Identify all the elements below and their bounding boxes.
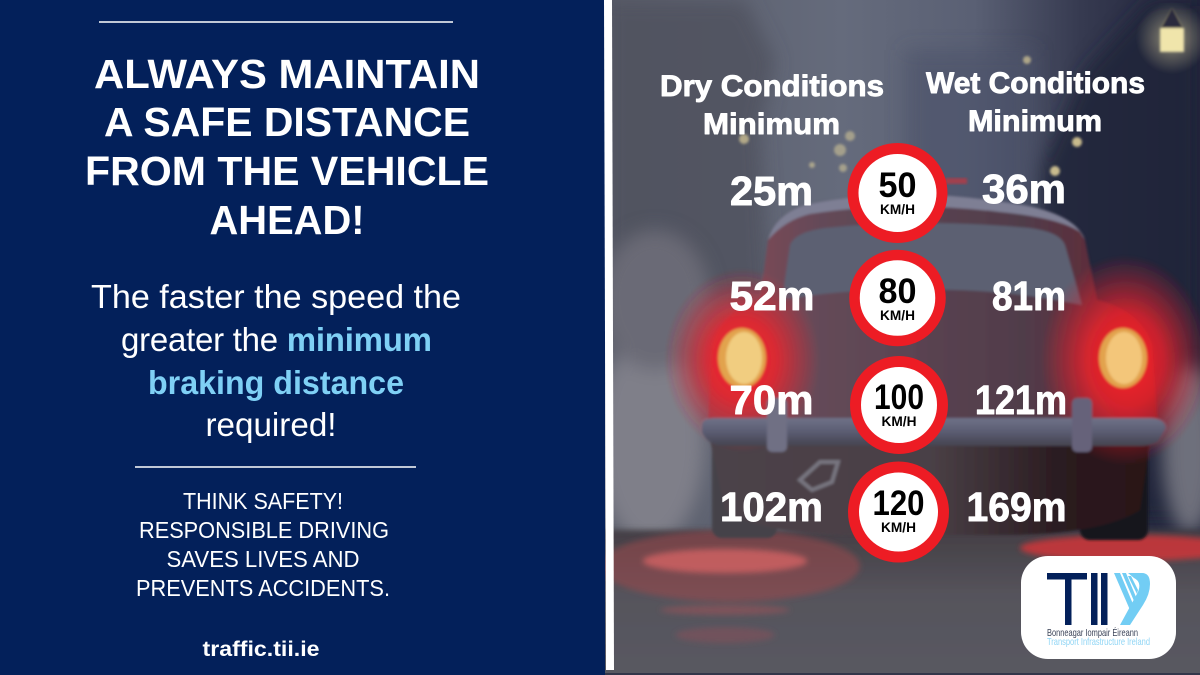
logo mark	[1047, 573, 1150, 625]
rear window	[782, 223, 1082, 305]
speed sign: 50 km/h: KM/H	[880, 201, 915, 217]
bumper	[702, 418, 1166, 446]
dry distances: 25m	[730, 168, 813, 214]
car	[664, 194, 1200, 540]
wet distances: 121m	[975, 377, 1067, 423]
speed sign: 50 km/h	[853, 148, 942, 238]
lower body	[710, 440, 1150, 535]
speed sign: 120 km/h: KM/H	[881, 519, 916, 535]
roof highlight	[768, 194, 1085, 240]
speed sign: 100 km/h: 100	[874, 378, 924, 417]
wet distances: 81m	[992, 273, 1066, 319]
speed sign: 80 km/h: 80	[878, 272, 916, 311]
text block: think safety: SAVES LIVES AND	[166, 546, 360, 572]
speed sign: 100 km/h: KM/H	[882, 413, 916, 429]
white divider stripe	[604, 0, 614, 670]
dry distances: 70m	[730, 377, 814, 423]
speed sign: 120 km/h	[854, 467, 944, 557]
heading: FROM THE VEHICLE	[85, 148, 489, 194]
wet distances	[966, 166, 1067, 530]
text block: braking distance message: required!	[206, 406, 336, 443]
column heading: wet conditions	[926, 67, 1145, 138]
mist	[595, 230, 1200, 545]
road reflections	[600, 530, 1200, 643]
panel: navy message panel	[0, 0, 606, 675]
text block: think safety	[136, 488, 390, 601]
speed sign: 80 km/h	[854, 255, 940, 341]
buildings	[605, 0, 1200, 520]
dry distances: 52m	[730, 273, 814, 319]
panel: foggy street photo with car	[590, 0, 1200, 675]
speed sign: 100 km/h	[856, 362, 942, 448]
speed sign: 120 km/h: 120	[872, 484, 924, 523]
distant lights	[739, 56, 1082, 176]
dry distances	[720, 168, 823, 530]
road	[590, 530, 1200, 675]
dry distances: 102m	[720, 484, 823, 530]
rear lights	[664, 268, 820, 452]
text block: think safety: RESPONSIBLE DRIVING	[139, 517, 389, 543]
heading: AHEAD!	[210, 197, 364, 243]
wet distances: 36m	[982, 166, 1066, 212]
column heading: wet conditions: Wet Conditions	[926, 67, 1145, 100]
text block: braking distance message: The faster the speed the	[91, 278, 461, 315]
heading: ALWAYS MAINTAIN	[94, 51, 480, 97]
column heading: wet conditions: Minimum	[968, 105, 1102, 138]
heading: A SAFE DISTANCE	[104, 99, 470, 145]
column heading: dry conditions	[660, 70, 884, 141]
logo: Transport Infrastructure Ireland: Transport Infrastructure Ireland	[1047, 636, 1150, 648]
text block: braking distance message: braking distance	[148, 364, 404, 401]
column heading: dry conditions: Minimum	[703, 108, 840, 141]
text block: braking distance message: greater the minimum	[121, 321, 432, 358]
text block: think safety: PREVENTS ACCIDENTS.	[136, 575, 390, 601]
exhaust	[800, 462, 838, 490]
speed sign: 50 km/h: 50	[878, 166, 916, 205]
website link: traffic.tii.ie	[202, 638, 320, 661]
speed sign: 80 km/h: KM/H	[880, 307, 915, 323]
street lamp	[1138, 4, 1200, 72]
text block: braking distance message	[91, 278, 461, 443]
roof brake light	[945, 178, 967, 184]
logo text: Bonneagar Iompair Éireann	[1047, 626, 1138, 639]
heading	[85, 51, 489, 243]
wheels	[712, 440, 777, 538]
wet distances: 169m	[966, 484, 1066, 530]
column heading: dry conditions: Dry Conditions	[660, 70, 884, 103]
text block: think safety: THINK SAFETY!	[183, 488, 343, 514]
logo: Transport Infrastructure Ireland	[1021, 556, 1176, 659]
upper body and roof	[708, 194, 1158, 425]
